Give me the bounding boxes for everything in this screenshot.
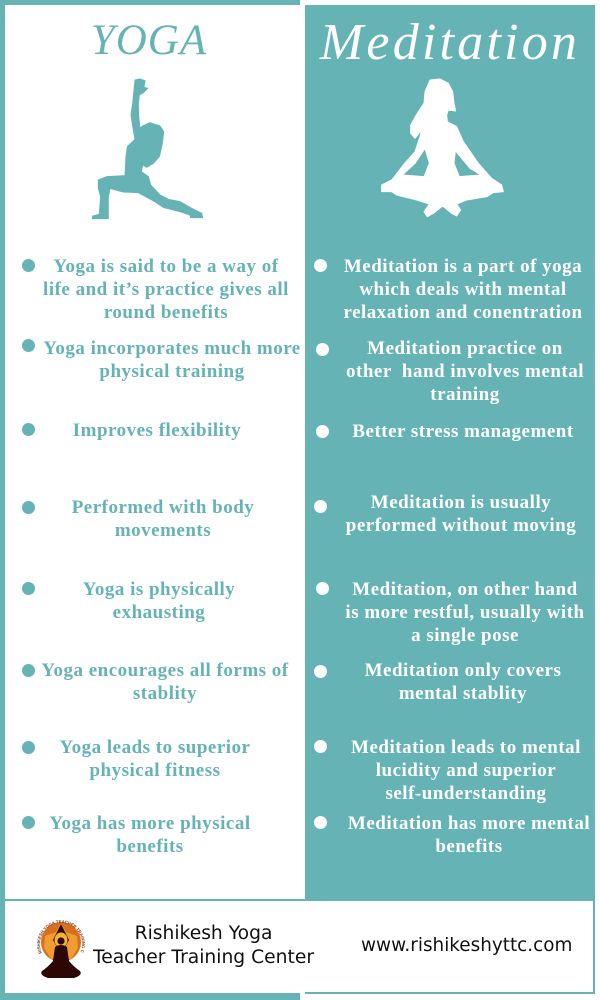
text: Yoga encourages all forms of stablity <box>41 660 289 704</box>
meditation point 1 <box>314 256 583 323</box>
text: Meditation, on other hand is more restful, usually with a single pose <box>345 579 585 646</box>
yoga point 4 <box>22 497 254 541</box>
text: Better stress management <box>352 421 574 442</box>
title: Meditation: Meditation <box>320 14 580 71</box>
meditation point 7 <box>314 737 581 804</box>
text: Meditation is usually performed without moving <box>346 492 576 536</box>
title: YOGA: YOGA <box>91 17 207 64</box>
yoga point 5 <box>22 579 235 623</box>
text: Meditation leads to mental lucidity and superior self-understanding <box>351 737 581 804</box>
text: Yoga leads to superior physical fitness <box>60 737 250 781</box>
meditation point 2 <box>316 338 584 405</box>
yoga point 1 <box>22 256 289 323</box>
footer panel <box>6 901 593 992</box>
meditation point 6 <box>314 660 561 704</box>
meditation point 8 <box>314 813 590 857</box>
text: Yoga incorporates much more physical training <box>43 338 301 382</box>
meditation point 3 <box>316 421 574 442</box>
text: Meditation practice on other hand involves mental training <box>346 338 584 405</box>
text: Meditation only covers mental stablity <box>365 660 561 704</box>
text: Yoga has more physical benefits <box>49 813 251 857</box>
text: Meditation is a part of yoga which deals with mental relaxation and conentration <box>343 256 583 323</box>
website: www.rishikeshyttc.com <box>361 935 572 956</box>
logo <box>37 920 85 978</box>
text: Meditation has more mental benefits <box>348 813 590 857</box>
yoga point 8 <box>22 813 251 857</box>
meditation point 5 <box>316 579 585 646</box>
icon: yoga pose silhouette <box>92 78 204 220</box>
yoga point 6 <box>22 660 289 704</box>
yoga point 7 <box>22 737 250 781</box>
organisation name: Rishikesh Yoga Teacher Training Center <box>93 923 314 968</box>
text: Performed with body movements <box>72 497 254 541</box>
text: Yoga is physically exhausting <box>83 579 235 623</box>
meditation point 4 <box>314 492 576 536</box>
text: Improves flexibility <box>73 420 241 441</box>
icon: meditation pose silhouette <box>381 78 504 218</box>
yoga point 2 <box>22 338 301 382</box>
text: Yoga is said to be a way of life and it’s practice gives all round benefits <box>43 256 289 323</box>
yoga point 3 <box>22 420 241 441</box>
